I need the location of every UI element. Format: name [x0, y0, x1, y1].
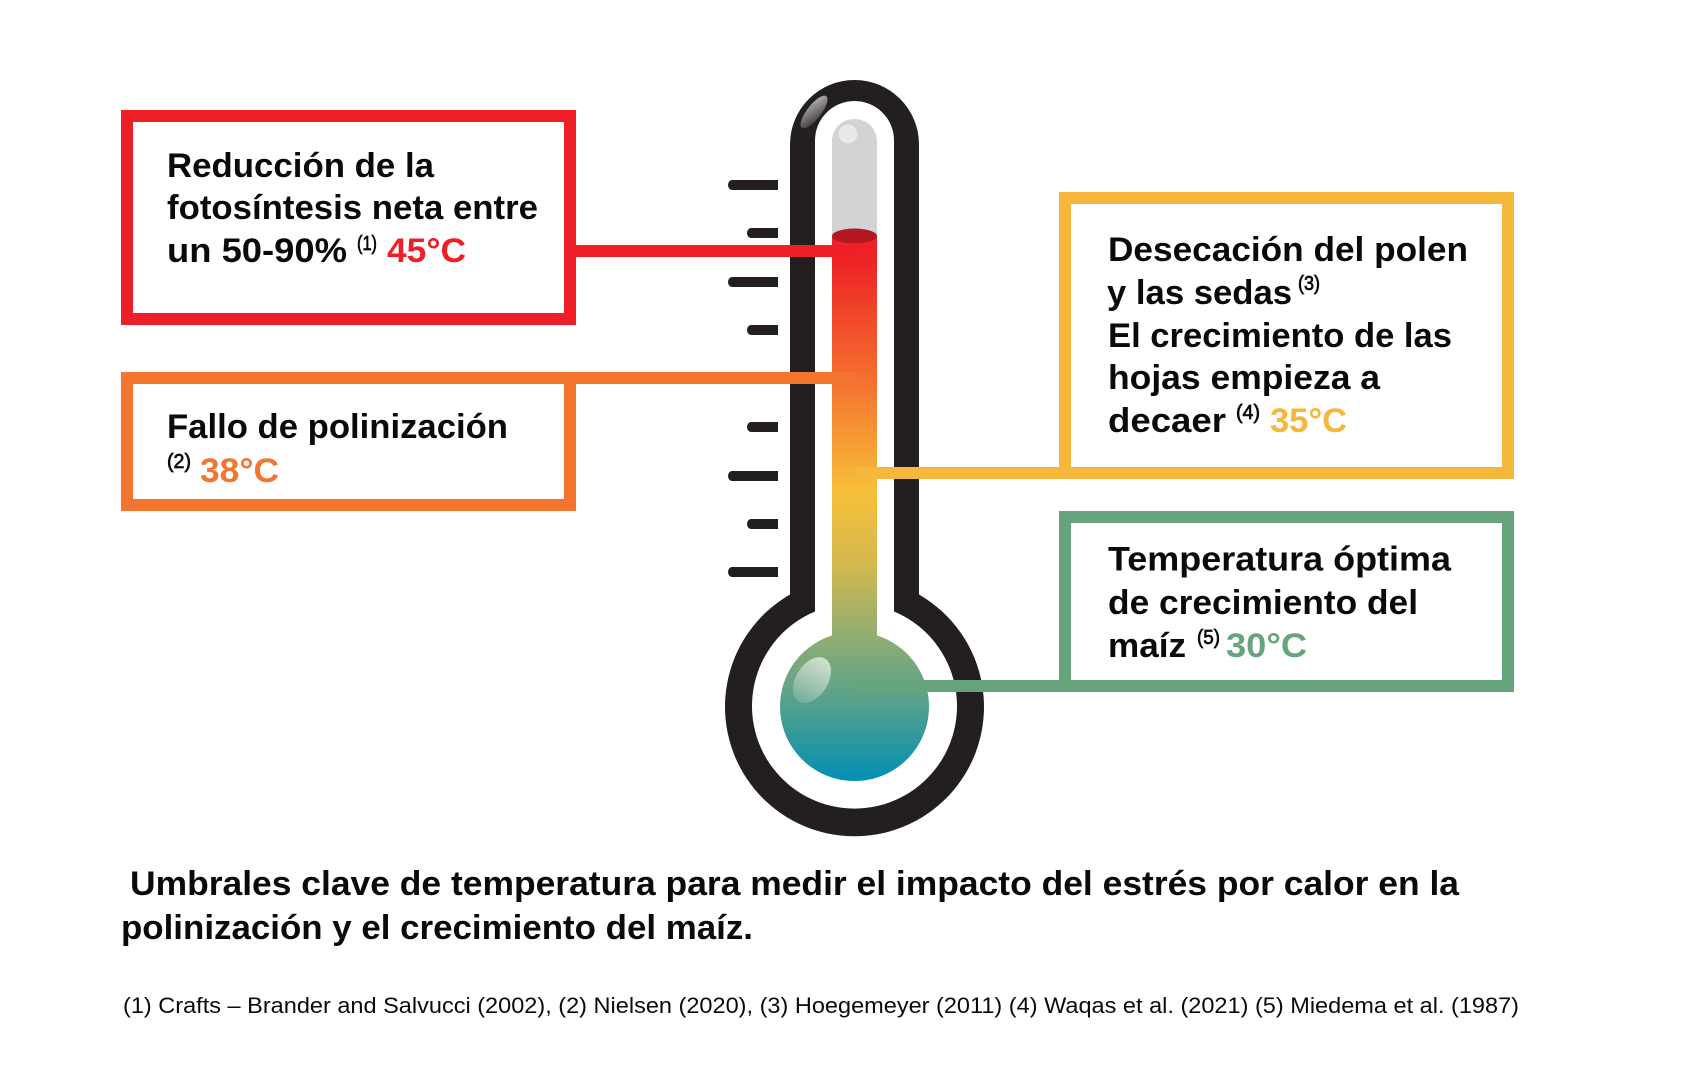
text: pollen and silk desiccation: Desecación del polen — [1108, 231, 1468, 269]
box: green — [1065, 517, 1508, 686]
text: pollen and silk desiccation: (4) — [1236, 402, 1260, 424]
text: photosynthesis reduction: 45°C — [387, 232, 466, 270]
empty tube — [832, 119, 877, 240]
text: pollination failure — [167, 408, 508, 490]
text: pollen and silk desiccation — [1107, 231, 1468, 440]
text: pollination failure: (2) — [167, 451, 191, 473]
connector: green — [856, 680, 1141, 692]
glass highlight — [796, 92, 832, 132]
text: optimal temperature: Temperatura óptima — [1108, 540, 1452, 578]
text: pollen and silk desiccation: decaer — [1108, 402, 1226, 440]
box: orange — [127, 378, 570, 505]
text: photosynthesis reduction — [167, 147, 538, 270]
text: pollen and silk desiccation: El crecimiento de las — [1108, 317, 1452, 355]
text: optimal temperature: (5) — [1197, 627, 1220, 649]
text: photosynthesis reduction: Reducción de la — [167, 147, 435, 185]
tube highlight — [838, 124, 858, 144]
connector: orange — [570, 372, 856, 384]
bulb highlight — [785, 650, 839, 710]
caption — [121, 865, 1460, 947]
fluid column and bulb — [780, 236, 929, 781]
text: pollination failure: Fallo de polinización — [167, 408, 508, 446]
callout: 45°C — [127, 116, 855, 319]
fluid surface — [832, 228, 877, 244]
text: optimal temperature: maíz — [1108, 627, 1186, 665]
box: red — [127, 116, 570, 319]
scale ticks — [728, 180, 778, 577]
text: photosynthesis reduction: un 50-90% — [167, 232, 347, 270]
caption: Umbrales clave de temperatura para medir el impacto del estrés por calor en la — [130, 865, 1460, 903]
thermometer — [725, 80, 984, 836]
caption: polinización y el crecimiento del maíz. — [121, 909, 753, 947]
references: (1) Crafts – Brander and Salvucci (2002), (2) Nielsen (2020), (3) Hoegemeyer (2011) (4) Waqas et al. (2021) (5) Miedema et al. (1987) — [123, 993, 1519, 1018]
callout: 30°C — [856, 517, 1508, 692]
text: pollen and silk desiccation: 35°C — [1270, 402, 1347, 440]
callout: 35°C — [855, 198, 1508, 479]
connector: red — [570, 245, 855, 257]
callout: 38°C — [127, 372, 856, 505]
text: photosynthesis reduction: (1) — [357, 233, 377, 255]
text: pollen and silk desiccation: (3) — [1298, 273, 1320, 295]
text: pollination failure: 38°C — [200, 452, 279, 490]
text: pollen and silk desiccation: hojas empieza a — [1108, 359, 1381, 397]
text: optimal temperature: de crecimiento del — [1108, 584, 1418, 622]
text: pollen and silk desiccation: y las sedas — [1107, 274, 1292, 312]
text: photosynthesis reduction: fotosíntesis neta entre — [167, 189, 538, 227]
text: optimal temperature — [1108, 540, 1452, 665]
text: optimal temperature: 30°C — [1226, 627, 1307, 665]
thermometer glass outline — [725, 80, 984, 836]
box: yellow — [1065, 198, 1508, 473]
connector: yellow — [855, 467, 1141, 479]
